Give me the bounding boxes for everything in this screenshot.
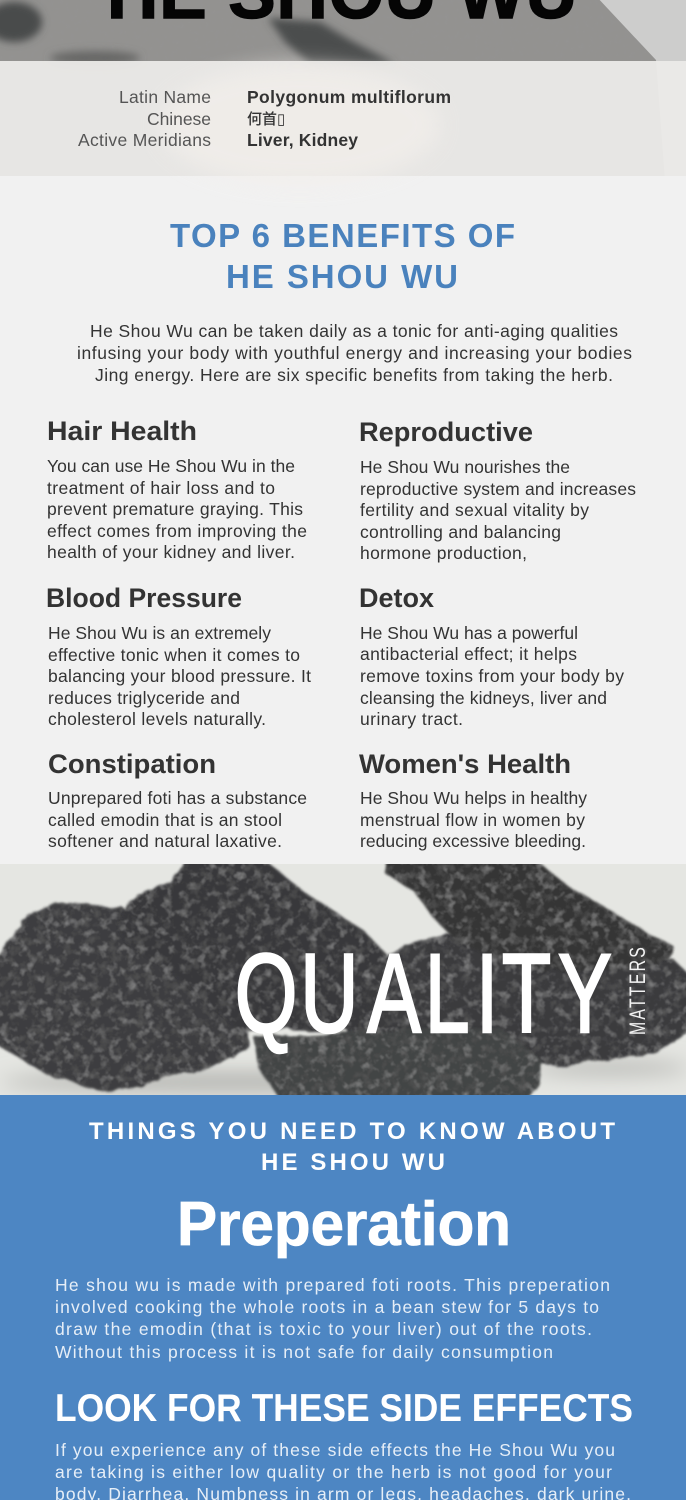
benefit: women's health: Women's Health [359, 749, 571, 779]
benefit: hair health: health of your kidney and liver. [47, 542, 295, 562]
benefit: detox: antibacterial effect; it helps [360, 644, 577, 664]
heading: things you need to know: THINGS YOU NEED TO KNOW ABOUT [89, 1118, 615, 1145]
value: Chinese: 何首▯ [247, 110, 285, 128]
heading: top 6 benefits: TOP 6 BENEFITS OF [170, 217, 515, 254]
hero photo with title [0, 0, 686, 64]
benefit: hair health: prevent premature graying. This [47, 499, 303, 519]
benefit: blood pressure: effective tonic when it comes to [48, 645, 300, 665]
rock: back right [340, 932, 686, 1067]
benefit: reproductive: reproductive system and increases [360, 479, 636, 499]
benefit: women's health [359, 749, 587, 851]
preparation text: He shou wu is made with prepared foti roots. This preperation [55, 1275, 610, 1295]
label: active meridians: Active Meridians [78, 130, 211, 150]
benefit: constipation [48, 749, 307, 851]
heading: side effects: LOOK FOR THESE SIDE EFFECTS [55, 1387, 633, 1430]
photo banner: quality matters [0, 858, 686, 1100]
preparation text: Without this process it is not safe for daily consumption [55, 1342, 553, 1362]
side effects text: are taking is either low quality or the herb is not good for your [55, 1462, 612, 1482]
benefit: blood pressure: cholesterol levels naturally. [48, 709, 266, 729]
heading: things you need to know [89, 1118, 615, 1176]
text: matters: MATTERS [627, 947, 651, 1035]
rock: left [0, 903, 250, 1092]
intro paragraph: He Shou Wu can be taken daily as a tonic for anti-aging qualities [90, 321, 618, 341]
heading: preparation: Preperation [177, 1190, 511, 1259]
benefit: constipation: softener and natural laxative. [48, 831, 282, 851]
side effects text [55, 1440, 631, 1500]
rock: top middle [118, 858, 385, 1030]
preparation text: involved cooking the whole roots in a bean stew for 5 days to [55, 1297, 599, 1317]
benefit: blood pressure: Blood Pressure [46, 583, 242, 613]
intro paragraph [77, 321, 632, 385]
benefit: blood pressure: reduces triglyceride and [48, 688, 240, 708]
benefit: hair health: effect comes from improving the [47, 521, 307, 541]
intro paragraph: Jing energy. Here are six specific benefits from taking the herb. [95, 365, 613, 385]
heading: top 6 benefits: HE SHOU WU [226, 258, 458, 295]
benefit: detox [359, 583, 624, 729]
text: quality: QUALITY [235, 931, 612, 1056]
value: active meridians: Liver, Kidney [247, 130, 358, 150]
benefit: hair health [47, 416, 307, 562]
benefit: detox: He Shou Wu has a powerful [360, 623, 578, 643]
benefit: detox: remove toxins from your body by [360, 666, 624, 686]
label: Latin name: Latin Name [119, 87, 211, 107]
label: Chinese: Chinese [147, 109, 211, 129]
benefit: detox: urinary tract. [360, 709, 463, 729]
benefit: constipation: Unprepared foti has a substance [48, 788, 307, 808]
panel: herb facts [0, 61, 686, 185]
heading: top 6 benefits [170, 217, 515, 295]
preparation text: draw the emodin (that is toxic to your liver) out of the roots. [55, 1319, 592, 1339]
rock: front [254, 1027, 542, 1100]
preparation text [55, 1275, 610, 1362]
value: Latin name: Polygonum multiflorum [247, 87, 451, 107]
benefit: constipation: called emodin that is an stool [48, 810, 282, 830]
benefit: reproductive: controlling and balancing [360, 522, 561, 542]
benefit: blood pressure [46, 583, 311, 729]
benefit: reproductive: Reproductive [359, 417, 533, 447]
benefit: reproductive: hormone production, [360, 543, 527, 563]
benefit: constipation: Constipation [48, 749, 216, 779]
heading: things you need to know: HE SHOU WU [261, 1149, 445, 1176]
benefit: blood pressure: He Shou Wu is an extremely [48, 623, 271, 643]
benefit: hair health: treatment of hair loss and to [47, 478, 275, 498]
benefit: reproductive: He Shou Wu nourishes the [360, 457, 570, 477]
intro paragraph: infusing your body with youthful energy and increasing your bodies [77, 343, 632, 363]
benefit: reproductive [359, 417, 636, 563]
benefit: women's health: He Shou Wu helps in healthy [360, 788, 587, 808]
benefit: women's health: menstrual flow in women by [360, 810, 585, 830]
benefit: hair health: You can use He Shou Wu in the [47, 456, 295, 476]
rock: top right [385, 858, 674, 970]
benefit: detox: cleansing the kidneys, liver and [360, 688, 607, 708]
panel: things to know [0, 1095, 686, 1500]
benefit: hair health: Hair Health [47, 416, 197, 446]
benefit: blood pressure: balancing your blood pressure. It [48, 666, 311, 686]
side effects text: If you experience any of these side effects the He Shou Wu you [55, 1440, 615, 1460]
benefit: women's health: reducing excessive bleeding. [360, 831, 586, 851]
benefit: detox: Detox [359, 583, 434, 613]
benefit: reproductive: fertility and sexual vitality by [360, 500, 589, 520]
